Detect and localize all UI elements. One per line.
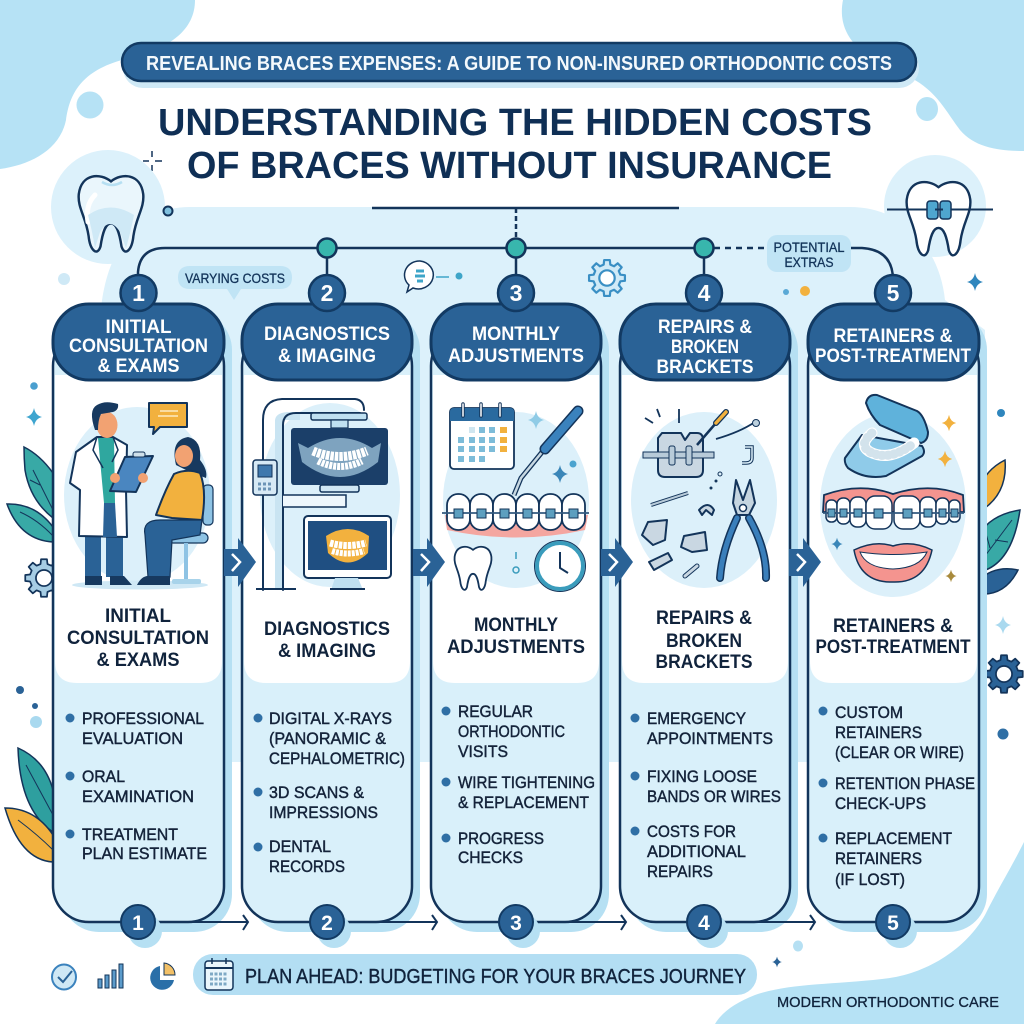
main title: UNDERSTANDING THE HIDDEN COSTS	[158, 102, 872, 144]
step 1 number top	[120, 275, 156, 311]
step 4 list	[630, 709, 781, 881]
main title	[158, 102, 872, 187]
step 3 list: WIRE TIGHTENING	[458, 773, 595, 792]
background blob: centre panel	[60, 207, 985, 762]
step 2 list: DIGITAL X-RAYS	[269, 709, 392, 728]
decorative circle top left	[76, 92, 104, 118]
step 3 header text	[448, 324, 584, 367]
step 1 title: CONSULTATION	[67, 628, 209, 649]
step 4 title: BROKEN	[666, 631, 742, 652]
step 5 title	[816, 616, 971, 658]
step 5 list: (CLEAR OR WIRE)	[835, 743, 964, 762]
sparkle near title	[143, 151, 162, 171]
step 5 list: RETENTION PHASE	[835, 774, 975, 793]
step 2 list: (PANORAMIC &	[269, 729, 387, 748]
step 5 list: RETAINERS	[835, 723, 922, 742]
step 4 list: COSTS FOR	[647, 822, 736, 841]
background blob: bottom right	[715, 842, 1024, 1024]
step 1 list: EXAMINATION	[82, 787, 194, 806]
step 4 list: APPOINTMENTS	[647, 729, 773, 748]
step 1 header text: INITIAL	[106, 317, 172, 338]
step 3 list: CHECKS	[458, 848, 523, 867]
panel: step 1 initial consultation	[53, 275, 232, 932]
step 3 list	[442, 702, 595, 867]
footer banner: PLAN AHEAD: BUDGETING FOR YOUR BRACES JOURNEY	[245, 966, 746, 988]
illustration: broken bracket and pliers	[631, 409, 777, 588]
chevrons on arrows	[232, 554, 805, 571]
step 4 list: ADDITIONAL	[647, 842, 746, 861]
step 1 header text	[69, 317, 208, 377]
step 1 list: TREATMENT	[82, 825, 178, 844]
panel: step 5 retainers	[808, 275, 987, 932]
icon: small chat bubble	[404, 261, 462, 292]
step 2 header text	[264, 324, 390, 367]
step 1 header text: & EXAMS	[98, 356, 180, 377]
step 3 header text: ADJUSTMENTS	[448, 346, 584, 367]
step 5 header text	[815, 326, 971, 367]
step 2 header text: & IMAGING	[278, 346, 376, 367]
callout: potential extras: POTENTIAL	[774, 240, 845, 255]
step 5 header text: RETAINERS &	[834, 326, 953, 347]
bottom numbers: 3	[510, 912, 522, 935]
icon: bar chart	[98, 964, 123, 988]
step 1 title	[67, 606, 209, 671]
step 5 list: CHECK-UPS	[835, 794, 926, 813]
bottom step arrows	[150, 915, 815, 930]
step 5 header text: POST-TREATMENT	[815, 346, 971, 367]
icon: plain tooth	[51, 150, 172, 264]
step 3 title: ADJUSTMENTS	[447, 637, 585, 658]
step 2 title: & IMAGING	[278, 641, 376, 662]
step 4 list: REPAIRS	[647, 862, 713, 881]
step 5 list: REPLACEMENT	[835, 829, 952, 848]
step 2 list: CEPHALOMETRIC)	[269, 749, 405, 768]
step 3 header text: MONTHLY	[472, 324, 560, 345]
step 1 header text: CONSULTATION	[69, 336, 208, 357]
step 5 number top: 5	[887, 280, 900, 306]
arrow: step 4 to 5	[789, 538, 821, 587]
illustration: calendar, braces and clock	[442, 404, 589, 592]
footer banner	[193, 954, 757, 995]
step 5 number top	[875, 275, 911, 311]
icon: budget check clock	[52, 964, 76, 990]
step 1 list: EVALUATION	[82, 729, 183, 748]
connector timeline	[138, 208, 893, 280]
step 4 title	[656, 608, 752, 673]
step 4 list: EMERGENCY	[647, 709, 746, 728]
panel: step 2 diagnostics	[242, 275, 420, 932]
illustration: doctor and patient	[64, 402, 213, 590]
step 4 header text: REPAIRS &	[658, 317, 752, 338]
step 1 list: PLAN ESTIMATE	[82, 844, 207, 863]
icon: gear top	[589, 260, 625, 296]
step 3 list: & REPLACEMENT	[458, 793, 589, 812]
step 3 list: ORTHODONTIC	[458, 722, 565, 741]
step 5 list: RETAINERS	[835, 849, 922, 868]
background blob: top right	[842, 0, 1024, 151]
step 2 number top	[309, 275, 345, 311]
decorative star right	[967, 273, 983, 291]
main title: OF BRACES WITHOUT INSURANCE	[187, 145, 832, 187]
step 4 list: BANDS OR WIRES	[647, 787, 781, 806]
decorative marks near footer	[772, 940, 803, 967]
arrow: step 2 to 3	[413, 538, 445, 587]
step 3 title: MONTHLY	[474, 615, 558, 636]
step 1 list: ORAL	[82, 767, 125, 786]
arrow: step 3 to 4	[601, 538, 633, 587]
bottom numbers: 4	[698, 912, 710, 935]
step 5 list: CUSTOM	[835, 703, 903, 722]
bottom numbers: 2	[321, 912, 333, 935]
step 2 list: IMPRESSIONS	[269, 803, 378, 822]
callout: varying costs	[178, 266, 292, 300]
step 4 list: FIXING LOOSE	[647, 767, 757, 786]
callout: varying costs: VARYING COSTS	[185, 271, 285, 286]
subtitle banner	[122, 43, 919, 88]
step 2 list: DENTAL	[269, 837, 331, 856]
icon: calendar	[205, 958, 233, 990]
arrow: step 1 to 2	[224, 538, 256, 587]
step 5 list: (IF LOST)	[835, 870, 905, 889]
left side decorations	[5, 273, 70, 862]
step 3 number top: 3	[510, 280, 522, 306]
step 4 header text	[656, 317, 754, 378]
step 2 title	[264, 619, 390, 662]
step 4 title: REPAIRS &	[656, 608, 752, 629]
callout: potential extras: EXTRAS	[784, 255, 834, 270]
step 2 list: RECORDS	[269, 857, 345, 876]
step 3 list: PROGRESS	[458, 829, 544, 848]
decorative blob top right	[916, 97, 938, 121]
step 4 header text: BROKEN	[671, 337, 739, 358]
step 5 title: RETAINERS &	[833, 616, 953, 637]
step 2 number top: 2	[321, 280, 333, 306]
step 4 number top: 4	[698, 280, 711, 306]
step 5 list	[818, 703, 975, 889]
callout: potential extras	[767, 235, 851, 272]
background blob: top left	[0, 0, 195, 169]
panel: step 4 repairs	[620, 275, 798, 932]
step 3 list: VISITS	[458, 742, 508, 761]
step 3 number top	[498, 275, 534, 311]
panel: step 3 monthly adjustments	[431, 275, 609, 932]
footer brand: MODERN ORTHODONTIC CARE	[777, 994, 999, 1011]
subtitle banner: REVEALING BRACES EXPENSES: A GUIDE TO NON-INSURED ORTHODONTIC COSTS	[146, 52, 892, 75]
step 1 title: & EXAMS	[96, 650, 180, 671]
step 1 list	[66, 709, 207, 863]
decorative dots	[783, 286, 810, 296]
bottom numbers: 1	[132, 912, 144, 935]
step 1 title: INITIAL	[105, 606, 171, 627]
step 4 title: BRACKETS	[656, 652, 752, 673]
bottom numbers: 5	[887, 912, 899, 935]
step 3 list: REGULAR	[458, 702, 533, 721]
step 4 number top	[686, 275, 722, 311]
step 2 title: DIAGNOSTICS	[264, 619, 390, 640]
illustration: x-ray machine and monitor	[253, 399, 400, 590]
bottom numbers	[121, 905, 917, 948]
right side decorations	[979, 409, 1023, 740]
illustration: retainer case, braces and smile	[820, 395, 966, 597]
step 2 header text: DIAGNOSTICS	[264, 324, 390, 345]
step 5 title: POST-TREATMENT	[816, 637, 971, 658]
step 2 list	[254, 709, 405, 876]
icon: pie chart	[150, 963, 175, 990]
step 4 header text: BRACKETS	[656, 357, 754, 378]
step 3 title	[447, 615, 585, 658]
icon: tooth with bracket	[884, 155, 993, 257]
step 1 number top: 1	[132, 280, 145, 306]
step 2 list: 3D SCANS &	[269, 783, 365, 802]
step 1 list: PROFESSIONAL	[82, 709, 204, 728]
